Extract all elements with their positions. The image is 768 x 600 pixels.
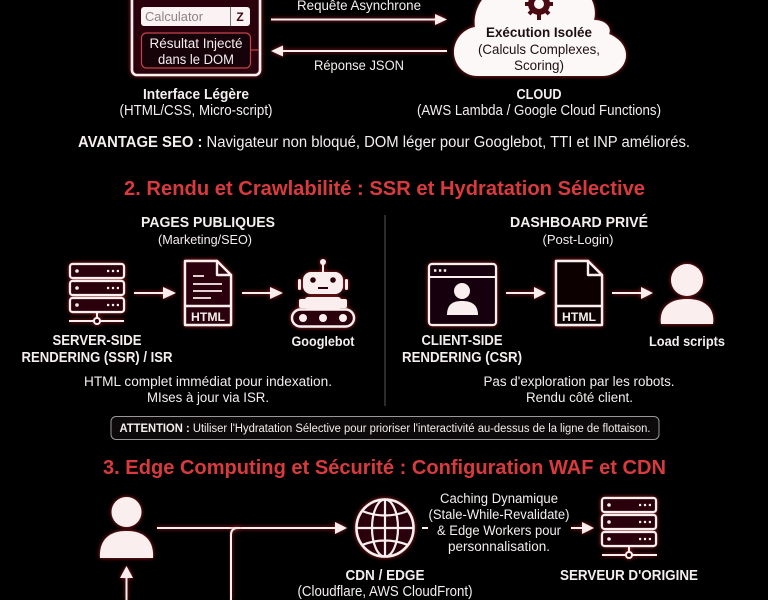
panel: public pages	[22, 215, 355, 405]
injected result box	[142, 33, 259, 68]
panel: cloud: Exécution Isolée	[486, 24, 592, 40]
icon: server	[69, 264, 124, 324]
text: dynamic caching: personnalisation.	[448, 539, 550, 554]
label: CDN edge: CDN / EDGE	[346, 568, 425, 584]
text: dynamic caching: Caching Dynamique	[440, 491, 558, 506]
text: dynamic caching	[428, 491, 570, 554]
label: SSR: SERVER-SIDE	[52, 333, 142, 349]
heading: section 2: 2. Rendu et Crawlabilité : SSR et Hydratation Sélective	[124, 178, 645, 200]
arrow: user up	[120, 566, 133, 600]
injected result box: Résultat Injecté	[150, 36, 242, 51]
arrow: html to user	[612, 287, 653, 299]
subheading: public pages: PAGES PUBLIQUES	[141, 215, 275, 231]
text: CSR description: Rendu côté client.	[526, 390, 633, 405]
caption: cloud: CLOUD	[516, 87, 562, 103]
panel: cloud: Scoring)	[514, 57, 564, 73]
panel: lightweight interface widget	[132, 0, 260, 75]
caption: interface: Interface Légère	[143, 87, 249, 103]
text: dynamic caching: (Stale-While-Revalidate)	[428, 507, 570, 522]
icon: html document	[556, 261, 602, 325]
icon: user	[661, 264, 713, 324]
calculator input: Z	[236, 10, 244, 24]
text: CSR description: Pas d'exploration par les robots.	[484, 374, 674, 389]
arrow: async request	[271, 14, 447, 25]
subheading: private dashboard: DASHBOARD PRIVÉ	[510, 214, 648, 231]
connector: branch down	[231, 528, 240, 600]
caption: cloud	[417, 87, 661, 119]
text: dynamic caching: & Edge Workers pour	[437, 523, 561, 538]
arrow: server to html	[134, 287, 176, 299]
panel: private dashboard	[402, 214, 725, 405]
label: CSR	[402, 333, 522, 366]
caption: interface	[120, 87, 272, 119]
subheading: private dashboard: (Post-Login)	[542, 232, 614, 247]
arrow: CDN to origin	[571, 522, 594, 534]
icon: html document: HTML	[191, 310, 225, 324]
arrow: JSON response	[271, 46, 447, 56]
text: SSR description: MIses à jour via ISR.	[147, 390, 269, 405]
arrow: html to googlebot	[242, 287, 283, 299]
caption: interface: (HTML/CSS, Micro-script)	[120, 103, 272, 119]
subheading: private dashboard	[510, 214, 648, 247]
caption: cloud: (AWS Lambda / Google Cloud Functions)	[417, 103, 661, 119]
text: SSR description: HTML complet immédiat pour indexation.	[84, 374, 332, 389]
arrow: browser to html	[506, 287, 546, 299]
icon: gear	[525, 0, 553, 20]
label: SSR	[22, 333, 173, 366]
icon: html document: HTML	[562, 310, 596, 324]
icon: html document	[185, 261, 231, 325]
text: SSR description	[84, 374, 332, 405]
text: SEO advantage: AVANTAGE SEO : Navigateur non bloqué, DOM léger pour Googlebot, TTI et INP améliorés.	[78, 134, 690, 151]
subheading: public pages	[141, 215, 275, 247]
cloud shape	[454, 0, 626, 76]
injected result box: dans le DOM	[158, 52, 234, 67]
icon: googlebot robot	[292, 259, 354, 326]
label: googlebot: Googlebot	[292, 334, 355, 349]
label: CDN edge	[298, 568, 472, 600]
label: origin server: SERVEUR D'ORIGINE	[560, 568, 698, 584]
label: SSR: RENDERING (SSR) / ISR	[22, 350, 173, 366]
label: CDN edge: (Cloudflare, AWS CloudFront)	[298, 584, 472, 600]
panel: cloud: (Calculs Complexes,	[478, 41, 600, 57]
icon: origin server	[602, 498, 657, 558]
widget frame	[132, 0, 260, 75]
heading: section 3: 3. Edge Computing et Sécurité : Configuration WAF et CDN	[103, 457, 666, 479]
subheading: public pages: (Marketing/SEO)	[158, 232, 252, 247]
label: response: Réponse JSON	[314, 58, 404, 73]
callout: attention	[111, 416, 659, 440]
label: CSR: CLIENT-SIDE	[422, 333, 503, 349]
label: CSR: RENDERING (CSR)	[402, 350, 522, 366]
callout: attention: ATTENTION : Utiliser l'Hydratation Sélective pour prioriser l'interactivité au-dessus de la ligne de flottaison.	[120, 423, 650, 435]
calculator input: Calculator	[145, 10, 203, 24]
icon: user	[100, 497, 153, 558]
icon: globe CDN	[356, 500, 414, 556]
vertical divider	[384, 215, 386, 406]
connector: CDN dash	[422, 527, 428, 529]
text: CSR description	[484, 374, 674, 405]
label: load scripts: Load scripts	[649, 334, 725, 349]
calculator input	[141, 7, 250, 26]
panel: cloud	[454, 0, 626, 76]
icon: browser window	[429, 264, 496, 325]
arrow: user to CDN	[157, 522, 347, 534]
